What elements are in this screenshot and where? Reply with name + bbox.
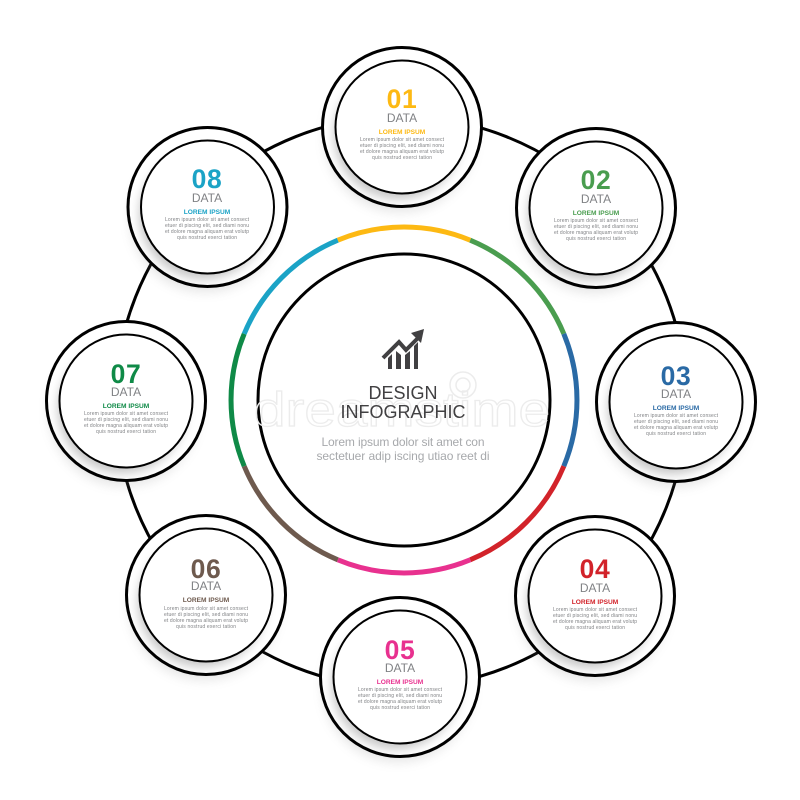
panel: 04: Lorem ipsum dolor sit amet consect	[553, 607, 638, 613]
panel: 02: 02	[581, 165, 611, 195]
heading: design infographic	[340, 383, 466, 422]
center description: Lorem ipsum dolor sit amet con	[322, 435, 484, 449]
panel: 03: Lorem ipsum dolor sit amet consect	[634, 413, 719, 419]
panel: 07: et dolore magna aliquam erat volutp	[84, 423, 168, 429]
panel: 08: et dolore magna aliquam erat volutp	[165, 229, 249, 235]
panel: 06: LOREM IPSUM	[183, 597, 230, 604]
panel: 06: quis nostrud exerci tation	[176, 624, 236, 630]
panel: 04: 04	[580, 554, 610, 584]
panel: 01: DATA	[387, 111, 417, 125]
panel: 03: et dolore magna aliquam erat volutp	[634, 425, 718, 431]
panel: 08: quis nostrud exerci tation	[177, 235, 237, 241]
panel: 07: 07	[111, 359, 141, 389]
center description: sectetuer adip iscing utiao reet di	[316, 449, 490, 463]
panel: 08	[128, 128, 287, 293]
panel: 07: LOREM IPSUM	[103, 403, 150, 410]
segmented colour ring	[231, 227, 577, 573]
panel: 07: DATA	[111, 385, 141, 399]
panel: 02: DATA	[581, 192, 611, 206]
panel: 06: Lorem ipsum dolor sit amet consect	[164, 606, 249, 612]
panel: 05: Lorem ipsum dolor sit amet consect	[358, 687, 443, 693]
panel: 01	[322, 48, 482, 213]
panel: 04	[516, 516, 674, 682]
panel: 04: etuer di piscing elit, sed diami nonu	[553, 613, 637, 619]
heading: design infographic: DESIGN	[368, 383, 438, 403]
panel: 08: Lorem ipsum dolor sit amet consect	[165, 217, 250, 223]
panel: 07	[46, 322, 206, 487]
central circle	[258, 254, 550, 546]
panel: 05: etuer di piscing elit, sed diami nonu	[358, 693, 442, 699]
watermark	[254, 372, 550, 437]
panel: 02: LOREM IPSUM	[573, 210, 620, 217]
panel: 07: Lorem ipsum dolor sit amet consect	[84, 411, 169, 417]
panel: 07: etuer di piscing elit, sed diami nonu	[84, 417, 168, 423]
panel: 05: quis nostrud exerci tation	[370, 705, 430, 711]
center description	[316, 435, 490, 463]
panel: 06: DATA	[191, 579, 221, 593]
panel: 01: quis nostrud exerci tation	[372, 155, 432, 161]
panel: 01: et dolore magna aliquam erat volutp	[360, 149, 444, 155]
icon: rising chart with arrow	[383, 329, 424, 369]
panel: 08: DATA	[192, 191, 222, 205]
panel: 03	[596, 322, 756, 488]
panel: 02	[516, 128, 676, 294]
panel: 04: LOREM IPSUM	[572, 599, 619, 606]
panel: 06: etuer di piscing elit, sed diami nonu	[164, 612, 248, 618]
panel: 04: quis nostrud exerci tation	[565, 625, 625, 631]
watermark: dreamstime	[254, 384, 550, 437]
panel: 05: 05	[385, 635, 415, 665]
panel: 07: quis nostrud exerci tation	[96, 429, 156, 435]
panel: 08: 08	[192, 164, 222, 194]
panel: 02: Lorem ipsum dolor sit amet consect	[554, 218, 639, 224]
panel: 05: DATA	[385, 661, 415, 675]
heading: design infographic: INFOGRAPHIC	[340, 402, 466, 422]
panel: 06: 06	[191, 554, 221, 584]
panel: 05: LOREM IPSUM	[377, 679, 424, 686]
panel: 05: et dolore magna aliquam erat volutp	[358, 699, 442, 705]
panel: 01: 01	[387, 84, 417, 114]
panel: 02: et dolore magna aliquam erat volutp	[554, 230, 638, 236]
panel: 08: etuer di piscing elit, sed diami nonu	[165, 223, 249, 229]
panel: 02: quis nostrud exerci tation	[566, 236, 626, 242]
panel: 01: etuer di piscing elit, sed diami nonu	[360, 143, 444, 149]
panel: 04: DATA	[580, 581, 610, 595]
panel: 03: DATA	[661, 387, 691, 401]
panel: 01: LOREM IPSUM	[379, 129, 426, 136]
panel: 04: et dolore magna aliquam erat volutp	[553, 619, 637, 625]
panel: 03: quis nostrud exerci tation	[646, 431, 706, 437]
panel: 08: LOREM IPSUM	[184, 209, 231, 216]
panel: 06: et dolore magna aliquam erat volutp	[164, 618, 248, 624]
panel: 05	[320, 598, 480, 763]
panel: 03: LOREM IPSUM	[653, 405, 700, 412]
panel: 06	[126, 516, 286, 681]
panel: 03: 03	[661, 361, 691, 391]
panel: 01: Lorem ipsum dolor sit amet consect	[360, 137, 445, 143]
outer connecting ring	[116, 116, 686, 688]
panel: 03: etuer di piscing elit, sed diami nonu	[634, 419, 718, 425]
panel: 02: etuer di piscing elit, sed diami nonu	[554, 224, 638, 230]
